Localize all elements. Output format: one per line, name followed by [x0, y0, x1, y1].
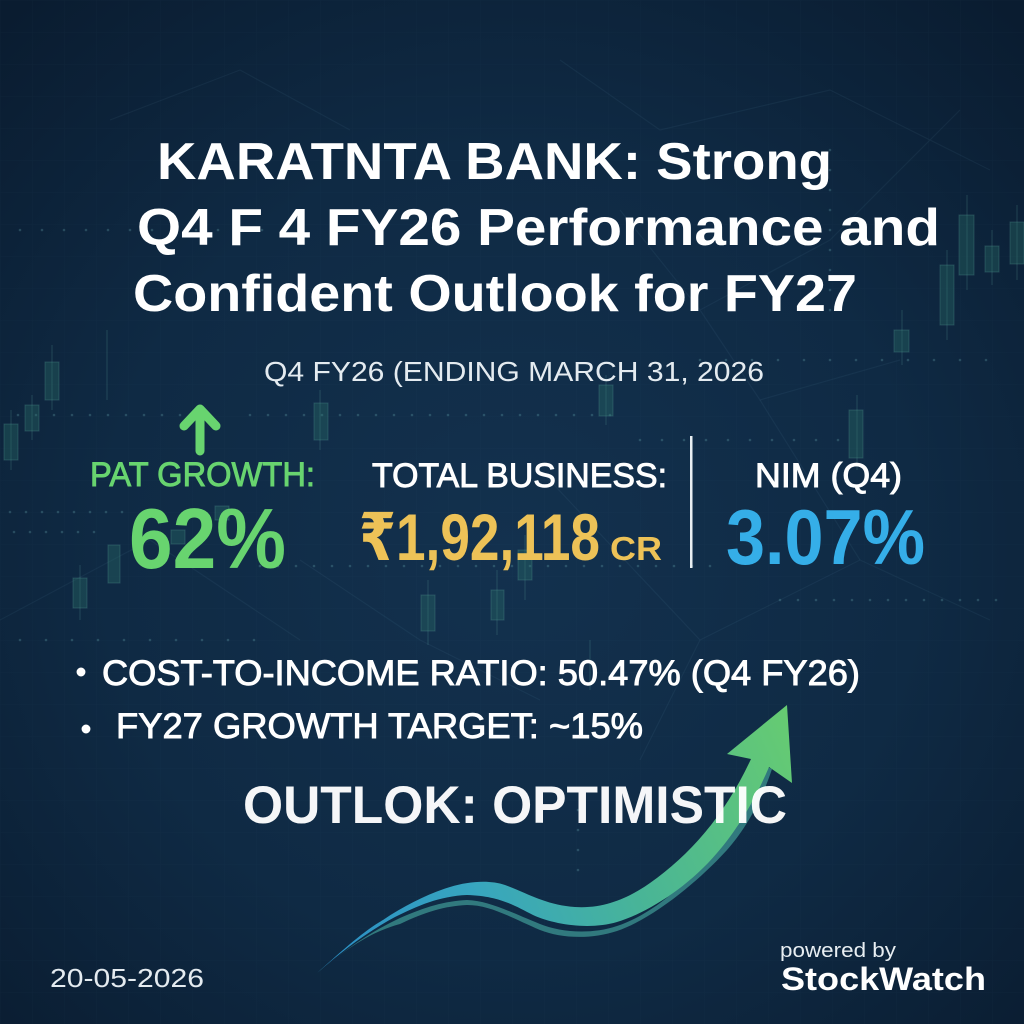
subtitle: Q4 FY26 (ENDING MARCH 31, 2026	[264, 356, 764, 387]
metric: PAT growth	[90, 409, 315, 587]
metric: total business	[359, 457, 667, 574]
bullet list: FY27 GROWTH TARGET: ~15%	[116, 707, 643, 746]
growth arrow	[317, 705, 792, 973]
metric: PAT growth: PAT GROWTH:	[90, 456, 315, 494]
bullet list	[77, 654, 860, 746]
metric: PAT growth: 62%	[129, 492, 286, 587]
metric: total business: CR	[610, 530, 662, 567]
divider	[690, 436, 692, 568]
metric: total business: TOTAL BUSINESS:	[372, 457, 667, 495]
powered by StockWatch logo: powered by	[780, 940, 896, 962]
bullet list: COST-TO-INCOME RATIO: 50.47% (Q4 FY26)	[102, 654, 860, 693]
powered by StockWatch logo: StockWatch	[781, 961, 986, 997]
background dots	[10, 150, 1010, 880]
metric: total business: ₹1,92,118	[359, 500, 600, 574]
date: 20-05-2026	[50, 963, 204, 993]
title: Q4 F 4 FY26 Performance and	[137, 199, 940, 257]
title: KARATNTA BANK: Strong	[157, 133, 832, 191]
powered by StockWatch logo	[780, 940, 986, 997]
metric: NIM: NIM (Q4)	[755, 457, 902, 495]
background network lines	[0, 60, 990, 760]
metric: NIM: 3.07%	[726, 493, 925, 581]
icon: up arrow	[184, 409, 216, 451]
title: Confident Outlook for FY27	[133, 265, 857, 323]
background candlesticks	[4, 195, 1024, 690]
outlook heading: OUTLOK: OPTIMISTIC	[243, 776, 787, 835]
title	[133, 133, 940, 323]
metric: NIM	[726, 457, 925, 581]
